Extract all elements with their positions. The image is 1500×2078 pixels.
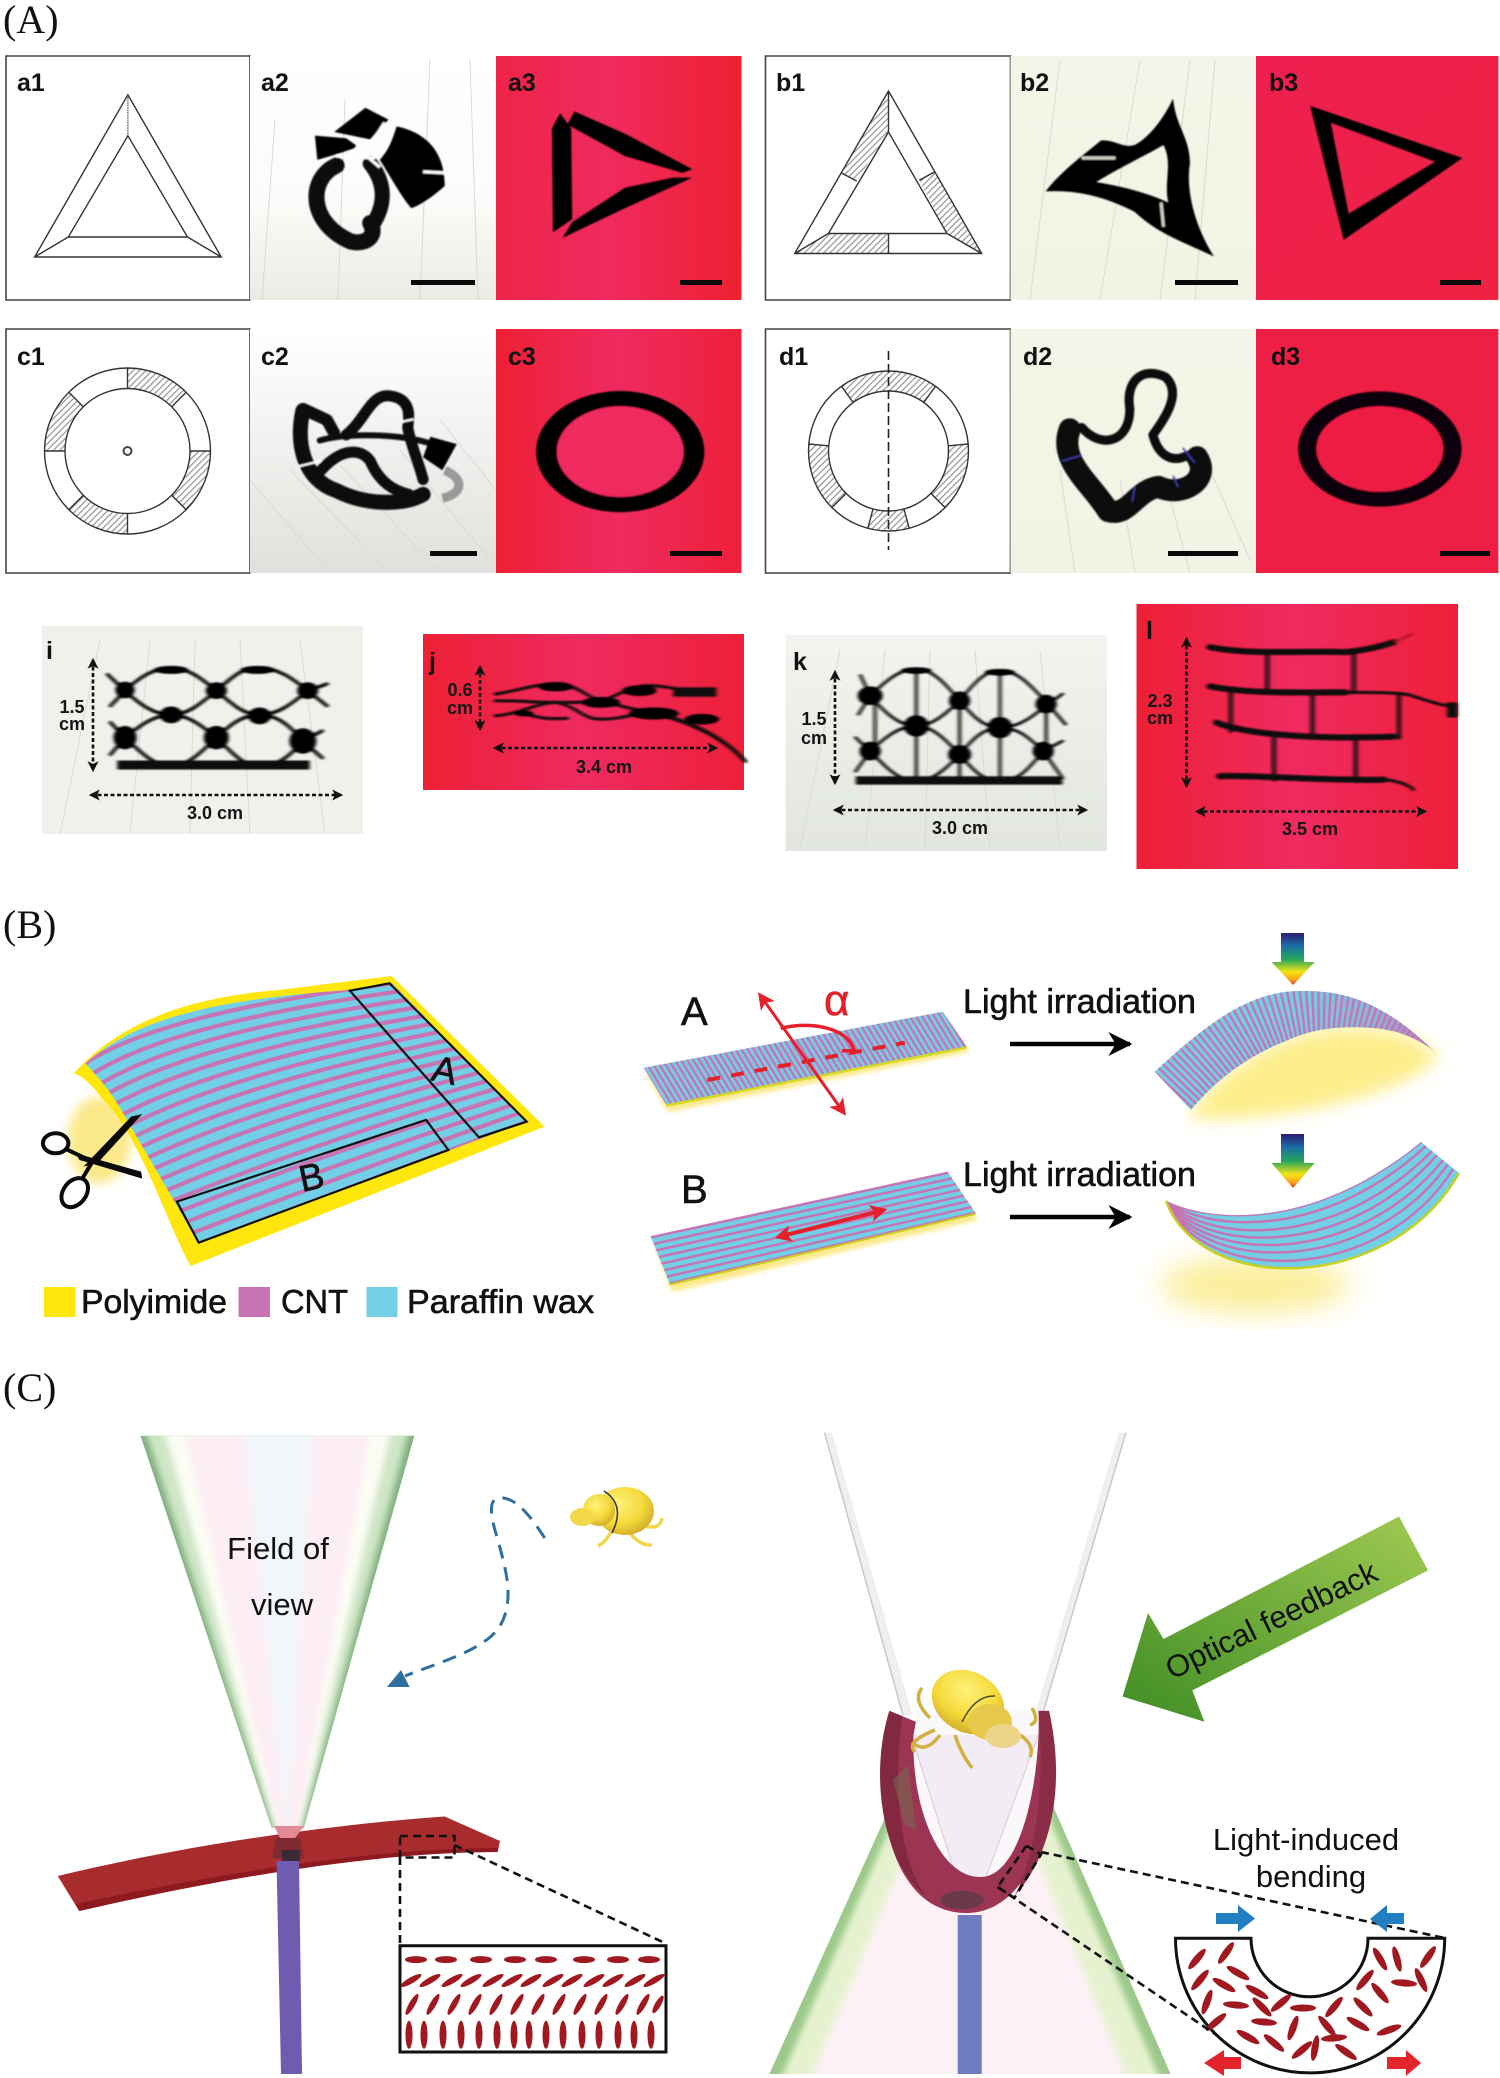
legend: materials [44,1283,595,1320]
panel d2: folded ring photo: d2 [1023,343,1052,371]
dashed zoom box and guide lines, left [400,1836,666,1944]
arrow: compression right-to-left [1370,1905,1404,1932]
panel k: lattice with vertical struts and dimensions: k [793,648,807,676]
panel i: lattice photo with dimensions: cm [59,714,85,734]
arrow: optical feedback [1123,1516,1428,1722]
strip A: transverse stripes with angle alpha: α [824,976,849,1025]
panel d1: ring schematic with symmetry axis: d1 [779,343,808,371]
panel l: brick pattern in red light with dimensions: cm [1147,708,1173,728]
red straight beam [58,1816,500,1911]
panel i: lattice photo with dimensions: i [46,637,53,665]
label: light-induced bending: Light-induced [1213,1822,1399,1857]
inset: aligned molecules [399,1946,666,2052]
label: field of view [227,1531,329,1622]
panel b1: hatched triangle schematic: b1 [776,69,805,97]
arrow: beetle path [387,1498,545,1687]
strip A: transverse stripes with angle alpha: A [681,990,708,1034]
panel i: lattice photo with dimensions [42,626,363,834]
panel a1: triangle schematic: a1 [17,69,45,97]
icon: beetle in trap [912,1657,1036,1768]
label: light-induced bending: bending [1256,1859,1366,1894]
inner converging cone [911,1735,1038,1878]
panel i: lattice photo with dimensions: 1.5 [59,697,85,717]
legend: materials: Paraffin wax [407,1283,595,1320]
label: light irradiation B: Light irradiation [963,1156,1196,1194]
panel a1: triangle schematic [6,56,250,300]
bent strip B [1160,1142,1459,1313]
sheet region label A: A [428,1048,461,1093]
panel j: lattice in red light with dimensions: cm [447,698,473,718]
panel k: lattice with vertical struts and dimensions: 3.0 cm [932,818,988,838]
bent U-shaped red beam [880,1711,1056,1913]
field-of-view light cone [140,1436,414,1828]
sheet region label B: B [295,1155,328,1200]
icon: beetle [570,1487,662,1546]
strip B: longitudinal stripes: B [681,1168,708,1212]
icon: rainbow light arrow A [1272,933,1315,985]
legend: materials: Polyimide [81,1283,227,1320]
arrow: expansion left [1204,2050,1241,2076]
arrow: process A [1010,1042,1130,1046]
panel d3: flat ring in red light: d3 [1271,343,1300,371]
panel b1: hatched triangle schematic [766,56,1010,300]
icon: scissors [43,1114,142,1211]
interior of the U-shaped beam [913,1711,1039,1877]
legend: materials: CNT [281,1283,348,1320]
panel b2: folded triangle photo: b2 [1020,69,1049,97]
panel l: brick pattern in red light with dimensions [1136,604,1458,869]
panel j: lattice in red light with dimensions: 0.6 [447,680,473,700]
optical fibre, left [276,1861,302,2074]
panel c3: flat ring in red light [496,329,742,573]
panel j: lattice in red light with dimensions [423,634,745,790]
panel j: lattice in red light with dimensions: 3.4 cm [576,757,632,777]
arrow: expansion right [1387,2050,1421,2076]
panel c2: folded ring photo [250,329,496,573]
label: light irradiation A: Light irradiation [963,983,1196,1021]
strip A: transverse stripes with angle alpha [644,976,969,1113]
panel a3: flat triangle in red light [496,56,742,300]
panel b3: flat triangle in red light [1256,56,1498,300]
bent strip A [1155,985,1440,1119]
panel l: brick pattern in red light with dimensions: 3.5 cm [1282,819,1338,839]
arrow: process B [1010,1215,1130,1219]
strip B: longitudinal stripes [651,1168,978,1292]
lower green light cone, right [769,1800,1171,2074]
panel d3: flat ring in red light [1256,329,1498,573]
inset: bent half-ring with disordered molecules [1176,1938,1445,2073]
icon: rainbow light arrow B [1272,1134,1315,1188]
patterned sheet with cut regions A and B [68,976,545,1266]
panel b2: folded triangle photo [1010,56,1256,300]
section label (B): (B) [3,902,56,947]
panel k: lattice with vertical struts and dimensions [786,635,1107,851]
arrow: compression left-to-right [1216,1905,1255,1932]
panel c1: ring schematic: c1 [17,343,45,371]
panel k: lattice with vertical struts and dimensions: cm [801,728,827,748]
panel b3: flat triangle in red light: b3 [1269,69,1298,97]
upper grey light cone, right [825,1433,1126,1715]
panel c2: folded ring photo: c2 [261,343,289,371]
panel a2: folded triangle photo: a2 [261,69,289,97]
panel c3: flat ring in red light: c3 [508,343,536,371]
label: light-induced bending [1213,1822,1399,1894]
section label (C): (C) [3,1365,56,1410]
label: field of view: Field of [227,1531,329,1566]
panel d2: folded ring photo [1010,329,1256,573]
label: optical feedback: Optical feedback [1160,1554,1383,1686]
panel d1: ring schematic with symmetry axis [766,329,1010,573]
panel k: lattice with vertical struts and dimensions: 1.5 [801,709,827,729]
dashed zoom box and guide lines, right [998,1846,1445,2035]
panel i: lattice photo with dimensions: 3.0 cm [187,803,243,823]
panel a3: flat triangle in red light: a3 [508,69,536,97]
panel j: lattice in red light with dimensions: j [428,648,436,676]
optical fibre, right [958,1915,982,2074]
panel a2: folded triangle photo [250,56,496,300]
panel l: brick pattern in red light with dimensions: l [1146,617,1153,645]
panel c1: ring schematic [6,329,250,573]
panel l: brick pattern in red light with dimensions: 2.3 [1147,691,1173,711]
label: field of view: view [251,1587,314,1622]
